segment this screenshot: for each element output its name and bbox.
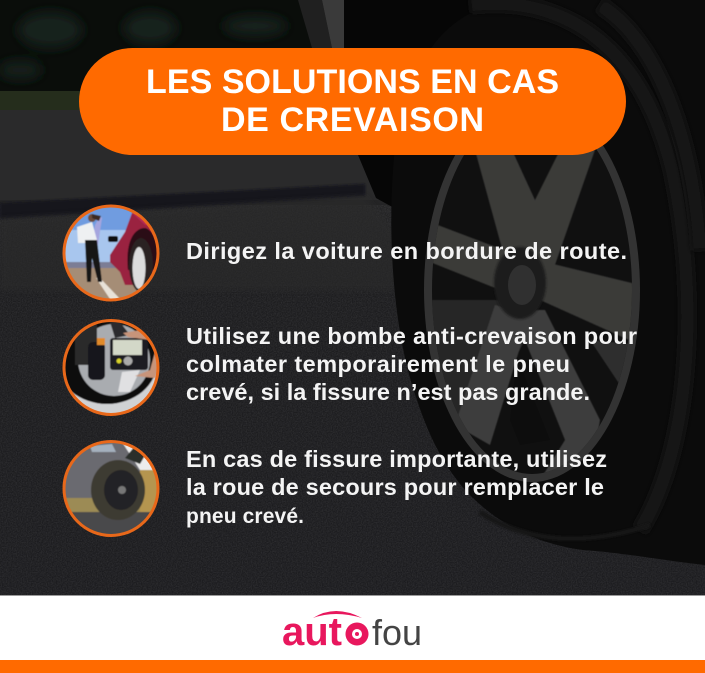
title text: DE CREVAISON [221, 101, 484, 139]
title text: LES SOLUTIONS EN CAS [146, 63, 559, 101]
step 3: photo of spare wheel [62, 440, 160, 537]
step 1: photo of driver beside car [62, 204, 160, 302]
step 3 text: En cas de fissure importante, utilisez [186, 446, 607, 472]
step 3 text: la roue de secours pour remplacer le [186, 474, 604, 500]
logo: autofou [282, 610, 422, 654]
car body and mud flap [298, 0, 332, 48]
step 1 text: Dirigez la voiture en bordure de route. [186, 238, 627, 264]
logo: autofou: aut [282, 610, 342, 654]
logo: autofou: fou [372, 612, 422, 653]
alloy wheel rim [424, 146, 640, 482]
step 3 text [186, 446, 607, 528]
step 2 text: colmater temporairement le pneu [186, 351, 570, 377]
title pill [79, 48, 626, 155]
step 2 text: crevé, si la fissure n’est pas grande. [186, 379, 590, 405]
step 2: photo of anti-puncture kit on wheel [62, 319, 160, 416]
footer band with logo [0, 595, 705, 673]
step 2 text: Utilisez une bombe anti-crevaison pour [186, 323, 637, 349]
title text [146, 63, 559, 139]
tyre [391, 200, 705, 565]
step 3 text: pneu crevé. [186, 505, 304, 528]
step 2 text [186, 323, 637, 405]
